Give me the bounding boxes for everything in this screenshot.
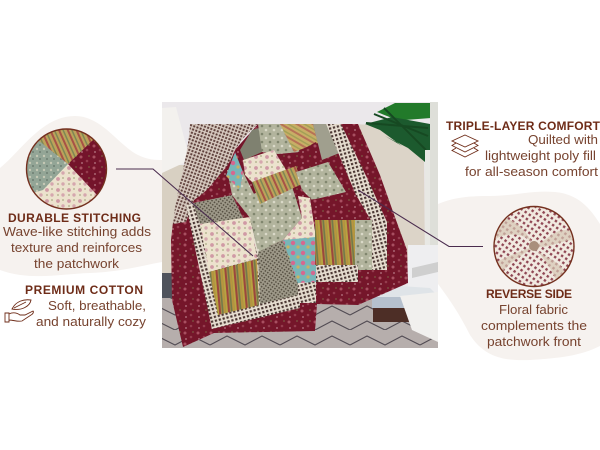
- maroon patch: [298, 142, 317, 152]
- sofa: [162, 165, 184, 273]
- text: triple-layer comfort: lightweight poly fill: [485, 148, 596, 163]
- dotted reverse fold: [173, 124, 258, 224]
- cream floral upper: [243, 150, 286, 184]
- plant: [365, 103, 431, 162]
- cream strip: [283, 196, 316, 240]
- books: [372, 285, 438, 342]
- rug: [162, 298, 438, 348]
- text: premium cotton: [36, 298, 147, 329]
- maroon patch centre: [312, 198, 320, 200]
- text: triple-layer comfort: [465, 132, 598, 179]
- heading: triple-layer comfort: TRIPLE-LAYER COMFORT: [446, 119, 600, 133]
- green column: [355, 220, 372, 270]
- icon: hand holding leaf: [5, 300, 33, 322]
- dotted inner border left and bottom: [186, 203, 300, 329]
- gray dot patch: [258, 240, 298, 304]
- lower stripes column: [315, 220, 357, 265]
- text: premium cotton: Soft, breathable,: [48, 298, 146, 313]
- connector line: durable stitching: [116, 169, 253, 256]
- text: durable stitching: Wave-like stitching adds: [3, 224, 152, 239]
- connector line: reverse side: [358, 190, 483, 246]
- text: durable stitching: [3, 224, 152, 271]
- heading: reverse side: REVERSE SIDE: [486, 287, 572, 301]
- gray patch under fold: [193, 195, 245, 224]
- text: triple-layer comfort: for all-season comfort: [465, 164, 598, 179]
- cream green patch below teal: [227, 170, 254, 218]
- text: reverse side: [481, 302, 587, 349]
- dotted left lower: [298, 282, 316, 303]
- teal patch small: [226, 152, 243, 190]
- gray green patch top: [240, 127, 262, 160]
- stripe patch top: [280, 124, 318, 152]
- text: triple-layer comfort: Quilted with: [528, 132, 598, 147]
- dotted strip right: [326, 124, 387, 270]
- background blob: right: [438, 192, 600, 360]
- maroon patch under fold: [208, 166, 228, 188]
- icon: layers: [452, 135, 478, 157]
- heading: premium cotton: PREMIUM COTTON: [25, 283, 143, 297]
- quilt: [171, 124, 408, 347]
- sofa arm: [358, 124, 425, 263]
- text: reverse side: Floral fabric: [499, 302, 568, 317]
- product photo: quilt on sofa: [162, 102, 438, 348]
- heading: durable stitching: DURABLE STITCHING: [8, 211, 141, 225]
- stripe patch: [209, 259, 259, 315]
- text: reverse side: complements the: [481, 318, 587, 333]
- green floral patch centre: [250, 188, 302, 252]
- light green patch top: [258, 124, 300, 154]
- dark floor band: [162, 273, 172, 298]
- text: reverse side: patchwork front: [487, 334, 581, 349]
- circle: stitching detail: [26, 129, 107, 210]
- text: durable stitching: texture and reinforces: [11, 240, 143, 255]
- window strip: [430, 102, 438, 245]
- circle: reverse side fabric: [494, 206, 574, 287]
- background blob: left: [0, 116, 162, 276]
- cream floral patch: [200, 217, 257, 272]
- stripe patch mid: [252, 166, 302, 204]
- pillow: [162, 107, 187, 173]
- text: durable stitching: the patchwork: [34, 256, 120, 271]
- gray top patch: [313, 124, 338, 160]
- maroon base of quilt: [171, 124, 408, 347]
- green patch right: [296, 162, 346, 200]
- teal floral patch: [283, 237, 316, 284]
- text: premium cotton: and naturally cozy: [36, 314, 147, 329]
- dotted under stripes: [316, 265, 358, 282]
